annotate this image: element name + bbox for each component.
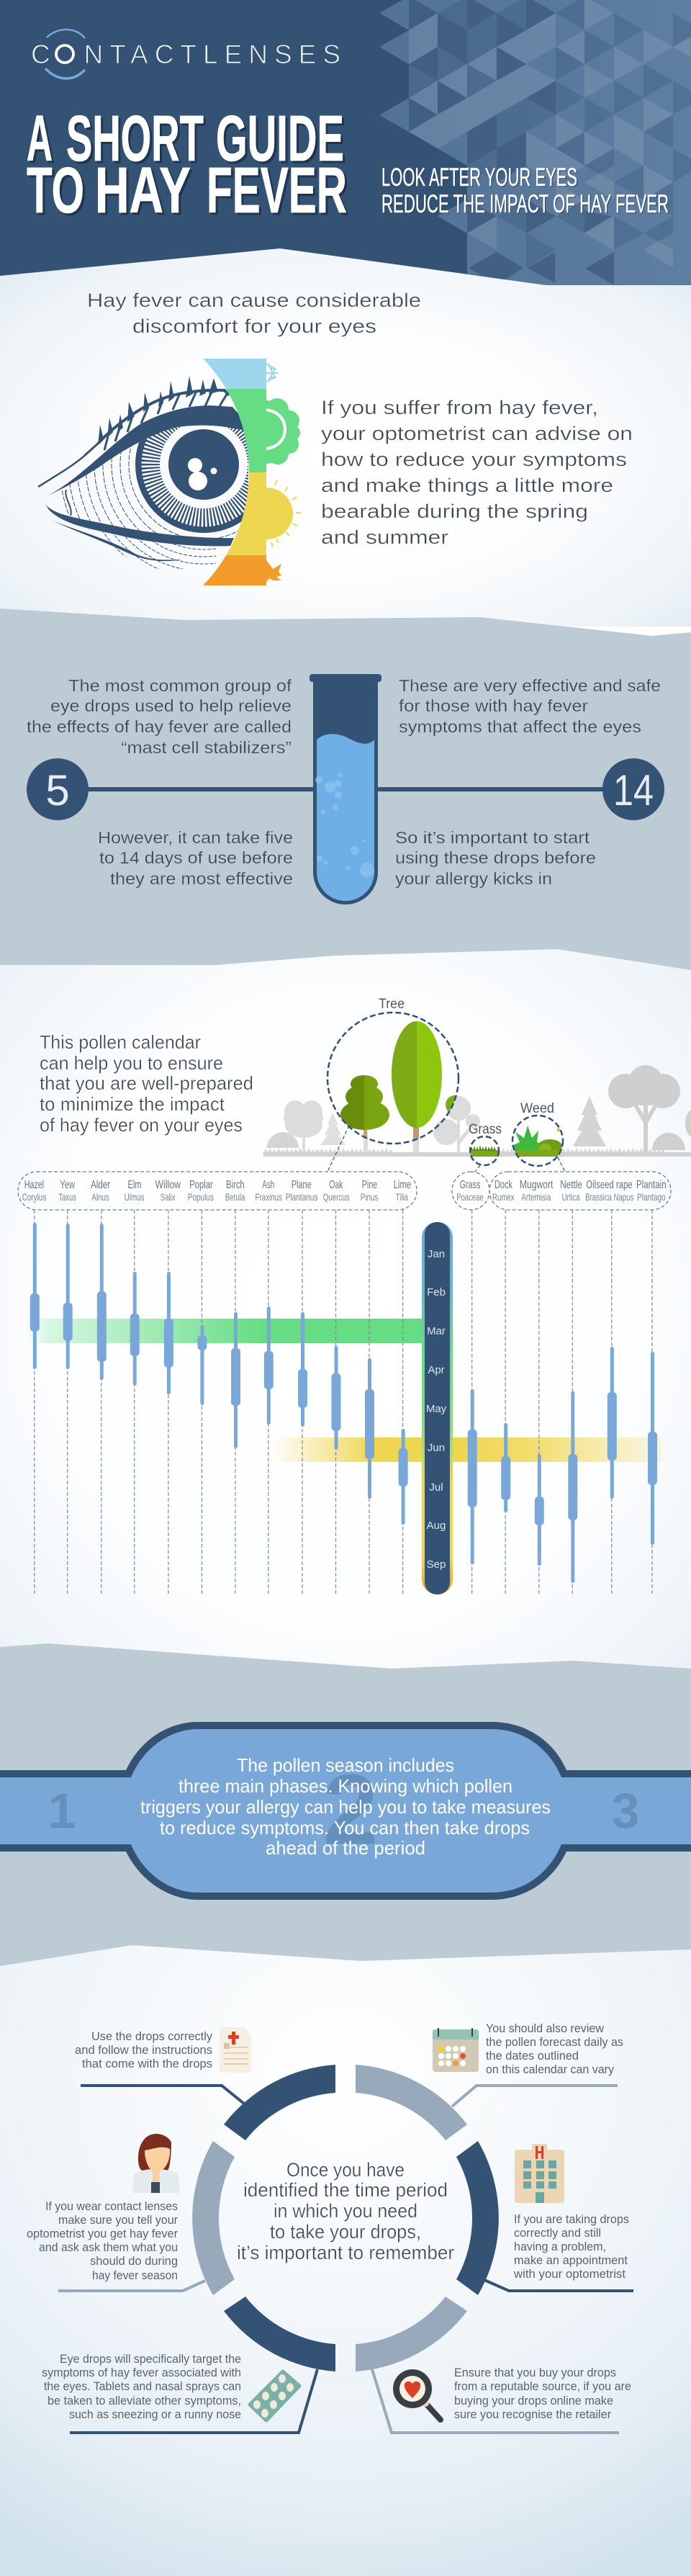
test tube: [310, 674, 381, 905]
callout: use drops correctly: that come with the drops: [82, 2057, 212, 2070]
ring centre text: Once you have: [286, 2159, 405, 2181]
title: HAY: [95, 155, 191, 227]
callout: other symptoms: symptoms of hay fever associated with: [42, 2366, 241, 2379]
text: start before allergy: using these drops before: [395, 848, 596, 867]
pill: weed names: Plantago: [637, 1191, 666, 1203]
pill: tree names: Alnus: [91, 1191, 109, 1203]
eye illustration: [37, 359, 301, 585]
pill: tree names: Tilia: [396, 1191, 408, 1203]
pill: weed names: Plantain: [636, 1179, 667, 1191]
pollen calendar intro: to minimize the impact: [40, 1093, 225, 1115]
text: start before allergy: So it’s important to start: [395, 828, 590, 847]
pollen season text: The pollen season includes: [237, 1754, 454, 1776]
weed illustration: [511, 1101, 563, 1166]
intro heading: discomfort for your eyes: [132, 315, 376, 337]
callout: appointment: If you are taking drops: [514, 2212, 629, 2226]
pill: grass names: Grass: [460, 1179, 480, 1191]
intro heading: Hay fever can cause considerable: [87, 290, 421, 311]
pill: weed names: Mugwort: [520, 1179, 554, 1191]
pollen chart: [27, 1210, 661, 1594]
text: effective and safe: for those with hay fever: [399, 696, 588, 715]
pill: weed names: Oilseed rape: [586, 1179, 633, 1191]
months pillar: May: [426, 1403, 447, 1415]
callout: appointment: with your optometrist: [513, 2267, 625, 2281]
icon: optometrist: [132, 2134, 180, 2193]
callout: contact lenses: hay fever season: [92, 2268, 178, 2282]
icon: prescription: [220, 2027, 251, 2073]
illustrated trees: [340, 1021, 455, 1139]
months pillar: Apr: [428, 1364, 445, 1376]
segment: top left: [224, 2065, 335, 2140]
ring centre text: identified the time period: [243, 2179, 448, 2201]
sclera hatching: [62, 446, 238, 538]
pill: tree names: Poplar: [189, 1179, 213, 1191]
callout: appointment: correctly and still: [514, 2226, 601, 2240]
pill: tree names: Yew: [60, 1179, 75, 1191]
lash band: [38, 390, 229, 487]
icon: magnifier with heart: [393, 2369, 441, 2420]
upper eyelid: [48, 405, 248, 495]
pill: tree names: Plane: [292, 1179, 312, 1191]
segment: bottom left: [224, 2297, 335, 2371]
pill: tree names: [18, 1172, 417, 1210]
months pillar: Feb: [427, 1286, 446, 1298]
panel: pollen season band: [0, 1643, 691, 1966]
weed plants: [511, 1126, 563, 1157]
callout: pollen forecast: [433, 2021, 623, 2106]
text: mast cell stabilizers: “mast cell stabilizers”: [121, 738, 292, 757]
text: mast cell stabilizers: eye drops used to help relieve: [50, 696, 292, 715]
intro paragraph: and summer: [321, 526, 448, 548]
circle: 14 days: [602, 758, 664, 820]
iris: [135, 425, 248, 533]
callout: appointment: make an appointment: [514, 2253, 628, 2267]
intro paragraph: and make things a little more: [321, 475, 613, 496]
pill: weed names: Rumex: [492, 1191, 515, 1203]
logo: CONTACTLENSES: [31, 40, 340, 69]
dashed guide lines: [35, 1210, 652, 1594]
pill: tree names: Corylus: [22, 1191, 46, 1203]
geometric triangle pattern: [374, 0, 691, 288]
text: mast cell stabilizers: [27, 676, 292, 757]
icon: maple leaf: [266, 560, 281, 582]
callout: contact lenses: and ask ask them what you: [39, 2240, 178, 2254]
callout: use drops correctly: [75, 2027, 251, 2104]
lower eyelid: [45, 504, 234, 546]
phase numbers: 1: [48, 1783, 76, 1839]
pill: tree names: Willow: [155, 1179, 181, 1191]
callout: other symptoms: such as sneezing or a runny nose: [69, 2407, 241, 2421]
title: [27, 103, 347, 227]
title: GUIDE: [216, 103, 344, 175]
pollen calendar intro: This pollen calendar: [40, 1031, 201, 1053]
pill: tree names: Lime: [394, 1179, 411, 1191]
pill: tree names: Pinus: [361, 1191, 378, 1203]
connectors to labels: [328, 1126, 565, 1172]
pollen season text: to reduce symptoms. You can then take drops: [160, 1817, 530, 1839]
pill: weed names: [489, 1172, 671, 1210]
pill: grass names: [452, 1172, 489, 1210]
title: SHORT: [66, 103, 204, 175]
segment: right: [456, 2141, 499, 2295]
central badge outline: [126, 1722, 566, 1900]
callout: contact lenses: If you wear contact lenses: [45, 2199, 178, 2213]
logo: [31, 30, 340, 78]
pill: tree names: Quercus: [323, 1191, 350, 1203]
circle: 5 days: 5: [45, 766, 70, 814]
circle: 14 days: 14: [613, 766, 654, 814]
phase numbers: [48, 1754, 639, 1865]
text: start before allergy: [395, 828, 596, 888]
callout: other symptoms: be taken to alleviate other symptoms,: [48, 2394, 241, 2407]
tree group illustration: [328, 997, 464, 1152]
ring centre text: in which you need: [274, 2200, 417, 2222]
panel: header: [0, 0, 691, 288]
callout: reputable source: Ensure that you buy your drops: [454, 2366, 616, 2379]
ring centre text: to take your drops,: [270, 2221, 421, 2243]
callout: pollen forecast: the pollen forecast daily as: [486, 2035, 623, 2049]
intro paragraph: how to reduce your symptoms: [321, 449, 627, 470]
season band: summer right: [453, 1437, 661, 1462]
text: five to 14 days: to 14 days of use before: [99, 848, 293, 867]
season band: spring: [27, 1319, 422, 1343]
segment: bottom right: [356, 2297, 467, 2371]
text: effective and safe: These are very effective and safe: [399, 676, 661, 695]
callout: contact lenses: [27, 2134, 205, 2291]
grey tree right of tall tree: [433, 1096, 480, 1152]
pill: tree names: Alder: [91, 1179, 110, 1191]
pollen season text: three main phases. Knowing which pollen: [179, 1775, 512, 1797]
text: start before allergy: your allergy kicks in: [395, 869, 552, 888]
callout: reputable source: sure you recognise the retailer: [454, 2407, 611, 2421]
pupil: [168, 429, 239, 500]
subtitle: [381, 163, 669, 218]
intro paragraph: If you suffer from hay fever,: [321, 397, 598, 418]
seasons bar: [202, 359, 266, 585]
months pillar: Jul: [429, 1481, 443, 1494]
callout: reputable source: buying your drops online make: [454, 2394, 613, 2407]
icon: sun: [266, 480, 301, 547]
pill: tree names: Ulmus: [125, 1191, 145, 1203]
pill: tree names: Oak: [329, 1179, 343, 1191]
callout: appointment: [484, 2144, 633, 2291]
grey tree left: [284, 1100, 323, 1152]
landscape: [263, 1065, 691, 1157]
title: A: [27, 103, 53, 175]
ring centre text: [237, 2159, 454, 2263]
segment: top right: [356, 2065, 467, 2140]
pill: weed names: Brassica Napus: [585, 1191, 633, 1203]
icon: tablets: [250, 2371, 299, 2420]
months pillar: Aug: [427, 1520, 446, 1532]
pill: tree names: Populus: [188, 1191, 214, 1203]
pill: tree names: Ash: [262, 1179, 274, 1191]
callout: other symptoms: Eye drops will specifically target the: [60, 2352, 241, 2366]
months pillar: Jun: [428, 1442, 445, 1454]
intro paragraph: bearable during the spring: [321, 501, 588, 522]
title: FEVER: [207, 155, 347, 227]
pollen season text: [140, 1754, 551, 1859]
horizontal ribbon: [0, 1770, 691, 1852]
weed label: Weed: [520, 1101, 554, 1116]
callout: contact lenses: should do during: [90, 2254, 178, 2268]
text: five to 14 days: [98, 828, 293, 888]
text: effective and safe: [399, 676, 661, 736]
text: mast cell stabilizers: the effects of hay fever are called: [27, 717, 292, 736]
months pillar: Mar: [427, 1325, 446, 1337]
big grey tree: [608, 1065, 680, 1152]
pollen season text: ahead of the period: [266, 1837, 425, 1859]
pill: tree names: Elm: [128, 1179, 141, 1191]
pill: tree names: Taxus: [58, 1191, 76, 1203]
callout: other symptoms: [42, 2352, 317, 2433]
callout: pollen forecast: the dates outlined: [486, 2049, 579, 2063]
callout: reputable source: [372, 2366, 631, 2433]
months pillar: Jan: [428, 1248, 445, 1260]
title: TO: [27, 155, 84, 227]
pill: tree names: Plantanus: [286, 1191, 317, 1203]
icon: calendar: [433, 2028, 479, 2072]
callout: pollen forecast: on this calendar can vary: [486, 2063, 614, 2076]
pill: tree names: Pine: [362, 1179, 377, 1191]
icon: hospital: [515, 2144, 564, 2203]
phase numbers: 3: [612, 1783, 639, 1839]
text: five to 14 days: they are most effective: [110, 869, 293, 888]
icon: snowflake: [266, 364, 278, 382]
circle: 5 days: [27, 758, 89, 820]
subtitle: LOOK AFTER YOUR EYES: [381, 163, 577, 192]
ring centre text: it’s important to remember: [237, 2242, 454, 2263]
pill: tree names: Fraxinus: [255, 1191, 282, 1203]
pill: tree names: Salix: [161, 1191, 176, 1203]
pill: weed names: Dock: [494, 1179, 513, 1191]
dashed circle: [328, 1013, 459, 1144]
ring diagram: [192, 2065, 499, 2371]
panel: eye drops band: [0, 609, 691, 970]
callout: use drops correctly: and follow the instructions: [75, 2043, 212, 2057]
pollen calendar intro: [40, 1031, 253, 1136]
central badge fill: [131, 1729, 561, 1893]
lashes: [98, 376, 218, 445]
pollen calendar intro: can help you to ensure: [40, 1052, 223, 1074]
grass label: Grass: [469, 1122, 502, 1137]
pollen calendar intro: of hay fever on your eyes: [40, 1114, 243, 1136]
pill: weed names: Nettle: [560, 1179, 582, 1191]
callout: pollen forecast: You should also review: [486, 2021, 605, 2035]
callout: reputable source: from a reputable source, if you are: [454, 2379, 631, 2393]
intro paragraph: your optometrist can advise on: [321, 423, 633, 444]
pill: weed names: Artemisia: [521, 1191, 551, 1203]
callout: appointment: having a problem,: [514, 2240, 606, 2253]
intro paragraph: [321, 397, 633, 548]
icon: cloud: [266, 398, 300, 465]
pill: tree names: Betula: [225, 1191, 245, 1203]
intro heading: [87, 290, 421, 337]
text: effective and safe: symptoms that affect the eyes: [399, 717, 641, 736]
pill: tree names: Hazel: [24, 1179, 44, 1191]
pollen season text: triggers your allergy can help you to take measures: [140, 1796, 551, 1818]
text: five to 14 days: However, it can take five: [98, 828, 293, 847]
callout: other symptoms: the eyes. Tablets and nasal sprays can: [44, 2379, 241, 2393]
callout: contact lenses: make sure you tell your: [58, 2213, 178, 2227]
pill: tree names: Birch: [226, 1179, 245, 1191]
months pillar: Sep: [427, 1558, 446, 1571]
segment: left: [192, 2141, 235, 2295]
grass patch: [470, 1145, 498, 1157]
pollen calendar intro: that you are well-prepared: [40, 1072, 253, 1094]
pollen bars: [30, 1223, 657, 1583]
eye: [37, 376, 248, 569]
pill: grass names: Poaceae: [456, 1191, 484, 1203]
callout: contact lenses: optometrist you get hay fever: [27, 2227, 178, 2240]
pill: weed names: Urtica: [562, 1191, 580, 1203]
season band: summer left: [271, 1437, 422, 1462]
callout: use drops correctly: Use the drops correctly: [91, 2029, 212, 2043]
grass illustration: [469, 1123, 501, 1167]
months pillar: [422, 1222, 453, 1594]
text: mast cell stabilizers: The most common group of: [68, 676, 292, 695]
phase numbers: 2: [323, 1754, 378, 1865]
tree label: Tree: [379, 997, 405, 1012]
timeline line: [58, 787, 633, 791]
